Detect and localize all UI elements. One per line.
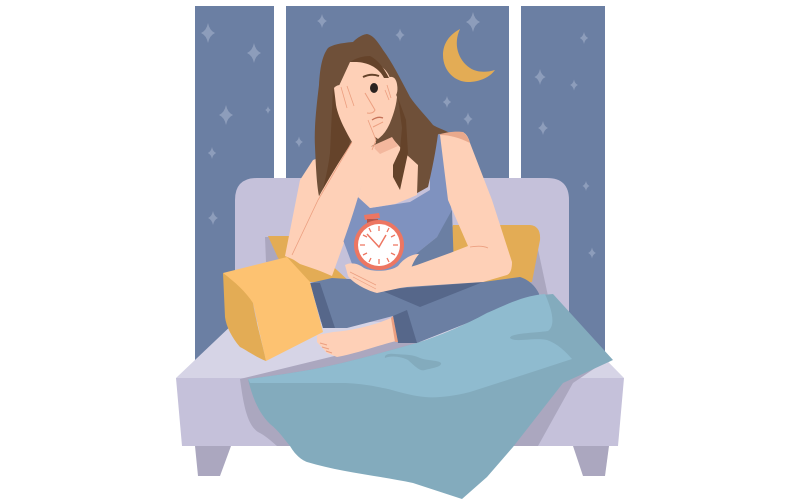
hair (315, 34, 450, 200)
chest skin (358, 138, 418, 208)
hand on face (334, 85, 376, 148)
hair front strand (393, 98, 408, 190)
blanket wrinkle (385, 354, 441, 370)
eyebrow (363, 75, 379, 77)
neck shade (372, 137, 398, 154)
headboard (235, 178, 569, 340)
arm crease (292, 142, 352, 255)
far shoulder skin (285, 150, 358, 276)
icon: stars (201, 12, 596, 258)
ear lines (385, 85, 391, 100)
mattress top (176, 322, 624, 378)
panel: night windows (195, 6, 605, 362)
mouth (372, 117, 383, 120)
tank top (343, 135, 452, 285)
raised arm (288, 142, 375, 275)
mattress front (176, 378, 624, 446)
face (338, 56, 397, 139)
blanket (248, 294, 613, 499)
stopwatch (354, 213, 404, 270)
woman (285, 34, 540, 357)
shoulder shadow (438, 132, 470, 143)
back pillows (265, 225, 548, 296)
foot (317, 316, 398, 357)
hand holding stopwatch (345, 254, 419, 293)
icon: crescent moon (443, 29, 495, 82)
near arm resting (400, 132, 512, 287)
bed (176, 178, 624, 476)
front pillow (223, 257, 323, 361)
pants (310, 277, 540, 343)
blanket shadow (240, 340, 604, 446)
tank top shadow (405, 210, 454, 270)
hair fringe (350, 56, 389, 78)
eye (370, 83, 378, 93)
blanket light fold (248, 294, 572, 397)
hair inner shade (320, 88, 350, 200)
ear (387, 77, 397, 98)
legs (195, 446, 609, 476)
elbow crease (470, 246, 488, 248)
nose (365, 93, 375, 113)
